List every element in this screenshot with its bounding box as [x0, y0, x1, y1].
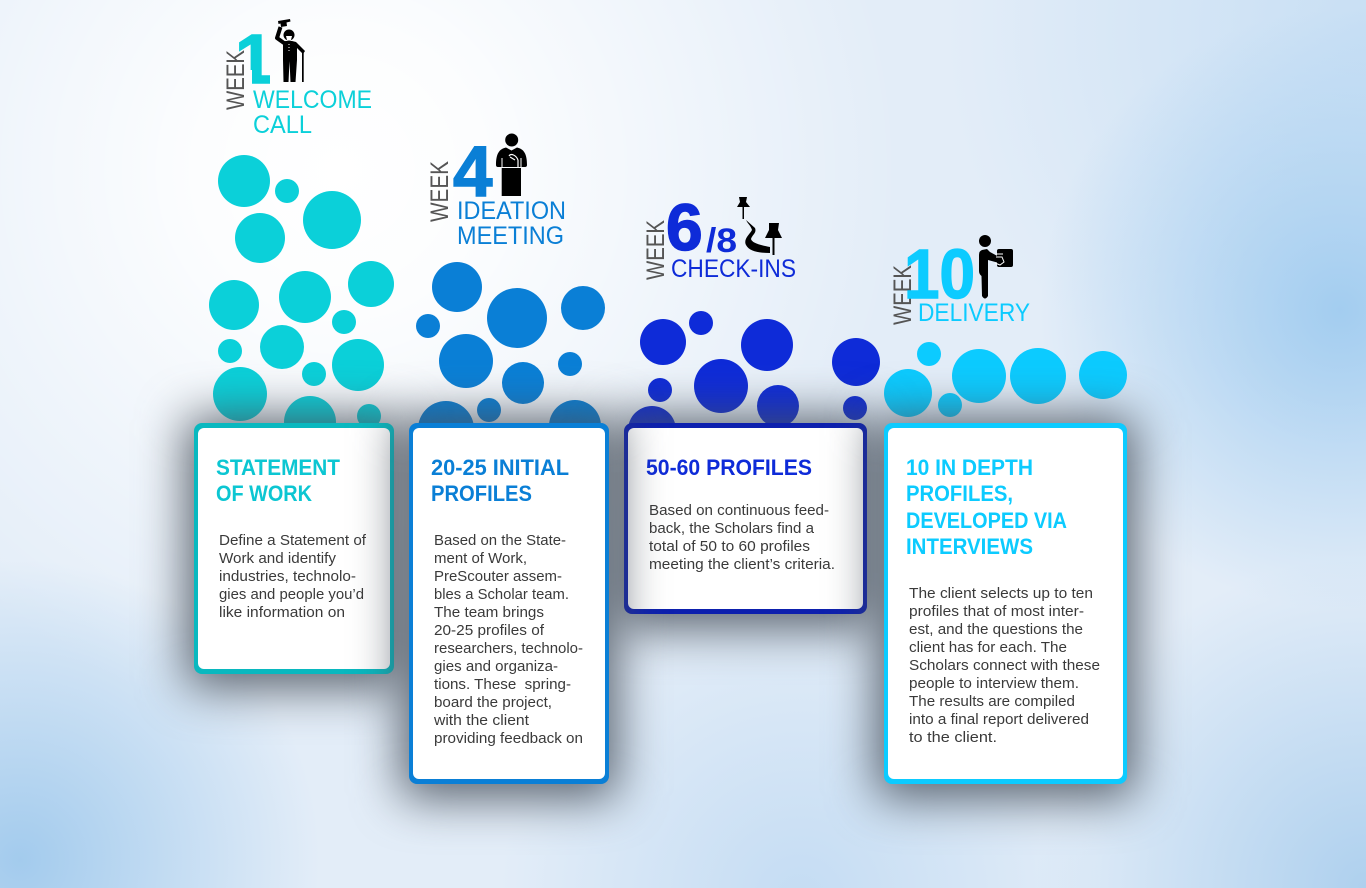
- title line 2: MEETING: [457, 222, 564, 250]
- card text: The results are compiled: [909, 693, 1075, 710]
- card text: like information on: [219, 604, 345, 621]
- card text: The team brings: [434, 604, 544, 621]
- card text: [433, 532, 583, 747]
- bubbles: week 1: [209, 155, 394, 448]
- card text: [219, 532, 367, 621]
- heading: week 4 ideation meeting: [426, 133, 566, 250]
- title: IDEATION: [457, 197, 566, 225]
- card text: meeting the client’s criteria.: [649, 556, 835, 573]
- card text: profiles that of most inter-: [909, 603, 1084, 620]
- card heading: DEVELOPED VIA: [906, 508, 1067, 533]
- bubbles: week 10: [884, 342, 1127, 417]
- card text: [649, 502, 835, 573]
- card text: [909, 585, 1100, 746]
- icon: person delivering box: [979, 235, 1013, 298]
- card text: people to interview them.: [909, 675, 1079, 692]
- card text: providing feedback on: [434, 730, 583, 747]
- icon: speaker at podium: [496, 134, 527, 196]
- title: DELIVERY: [918, 299, 1030, 327]
- card text: board the project,: [434, 694, 552, 711]
- heading: week 1 welcome call: [222, 19, 372, 139]
- card text: 20-25 profiles of: [434, 622, 545, 639]
- card text: client has for each. The: [909, 639, 1067, 656]
- card text: tions. These spring-: [434, 676, 571, 693]
- card text: Define a Statement of: [219, 532, 367, 549]
- card text: ment of Work,: [434, 550, 527, 567]
- week fraction: /8: [706, 222, 737, 260]
- card heading: [431, 455, 569, 506]
- card text: PreScouter assem-: [434, 568, 562, 585]
- week number: 1: [235, 20, 274, 98]
- card text: gies and people you’d: [219, 586, 364, 603]
- card text: Based on the State-: [434, 532, 566, 549]
- icon: man raising hat: [277, 19, 305, 82]
- card text: industries, technolo-: [219, 568, 356, 585]
- card heading: [216, 455, 341, 506]
- card text: into a final report delivered: [909, 711, 1089, 728]
- card heading: 10 IN DEPTH: [906, 455, 1033, 480]
- week label: WEEK: [222, 50, 250, 110]
- card text: to the client.: [909, 729, 997, 746]
- card heading: OF WORK: [216, 481, 312, 506]
- title line 2: CALL: [253, 111, 312, 139]
- icon: pins and road: [737, 197, 782, 255]
- card text: with the client: [433, 712, 530, 729]
- card heading: PROFILES,: [906, 481, 1013, 506]
- panel: initial profiles: [401, 417, 617, 798]
- card text: Based on continuous feed-: [649, 502, 829, 519]
- card heading: STATEMENT: [216, 455, 341, 480]
- week number: 10: [904, 235, 975, 313]
- card text: total of 50 to 60 profiles: [649, 538, 810, 555]
- title: CHECK-INS: [671, 255, 796, 283]
- week label: WEEK: [642, 220, 670, 280]
- panel: 10 in depth profiles: [876, 417, 1135, 798]
- panel: statement of work: [186, 417, 402, 688]
- title: WELCOME: [253, 86, 372, 114]
- week label: WEEK: [889, 265, 917, 325]
- card text: Work and identify: [219, 550, 336, 567]
- card text: The client selects up to ten: [909, 585, 1093, 602]
- bubbles: week 4: [416, 262, 605, 457]
- card text: back, the Scholars find a: [649, 520, 815, 537]
- card heading: 20-25 INITIAL: [431, 455, 569, 480]
- bubbles: week 6/8: [628, 311, 880, 454]
- card heading: PROFILES: [431, 481, 532, 506]
- week label: WEEK: [426, 161, 454, 222]
- panel: 50-60 profiles: [616, 417, 875, 628]
- heading: week 10 delivery: [889, 235, 1030, 327]
- card heading: 50-60 PROFILES: [646, 455, 812, 480]
- heading: week 6/8 check-ins: [642, 190, 796, 283]
- card heading: INTERVIEWS: [906, 534, 1033, 559]
- card heading: [906, 455, 1067, 559]
- card text: gies and organiza-: [434, 658, 558, 675]
- card text: est, and the questions the: [909, 621, 1083, 638]
- week number: 6: [666, 190, 703, 264]
- card text: Scholars connect with these: [909, 657, 1100, 674]
- card text: bles a Scholar team.: [434, 586, 569, 603]
- week number: 4: [453, 133, 493, 212]
- card text: researchers, technolo-: [434, 640, 583, 657]
